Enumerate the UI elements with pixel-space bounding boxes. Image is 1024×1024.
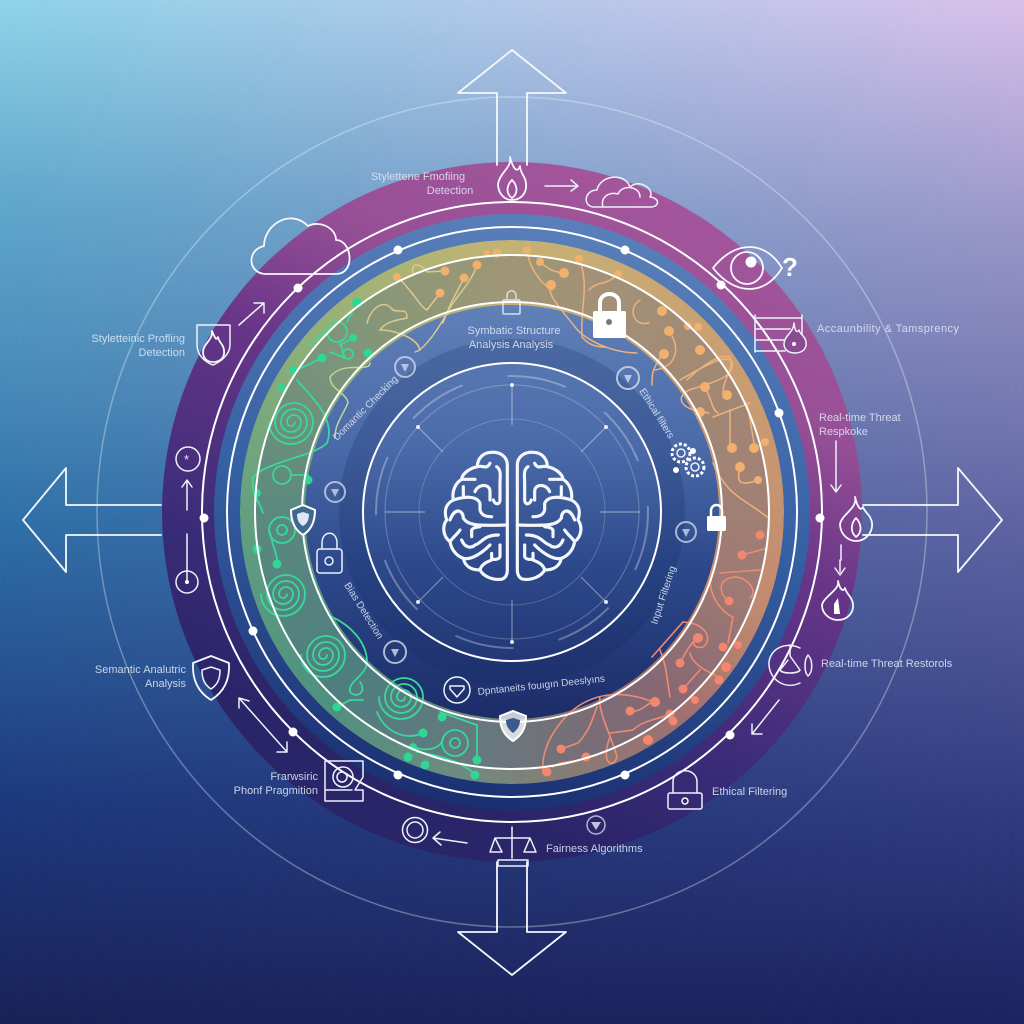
arrow: flame to cloud	[545, 180, 578, 191]
arrow: lower right link	[835, 560, 845, 575]
arrow: lower right	[752, 700, 779, 734]
icon: eye with question mark	[713, 247, 798, 289]
icon: bottom shield badge	[500, 711, 526, 741]
icon: eye with question mark: ?	[782, 252, 798, 282]
arrow: left small	[433, 832, 467, 845]
label: threat restorals: Real-time Threat Restorols	[821, 658, 953, 670]
label: real-time threat response: Real-time Threat	[819, 412, 901, 424]
arrow: up left side	[182, 480, 192, 510]
icon: gears	[672, 444, 704, 476]
icon: large filled lock	[593, 294, 626, 338]
label: syntactic structure: Symbatic Structure	[468, 325, 560, 337]
arrow: down	[458, 862, 566, 975]
arrow: cloud down	[239, 303, 264, 325]
icon: top flame	[498, 157, 526, 200]
label: input filtering, rotated: Input Filtering	[649, 565, 679, 626]
label: profiling detection left: Detection	[139, 347, 185, 359]
icon: inner faint lock	[503, 291, 520, 314]
icon: small shield left	[291, 505, 315, 535]
icon: badge ethical	[617, 367, 639, 389]
label: profiling detection top: Detection	[427, 185, 473, 197]
brain icon	[444, 452, 581, 579]
spectrum ring	[240, 240, 784, 784]
green circuit traces and spirals	[252, 303, 477, 775]
salmon circuit nodes	[542, 530, 764, 776]
icon: scales	[490, 827, 536, 866]
purple outer band	[162, 162, 862, 862]
yellow and pale traces	[330, 265, 477, 438]
main white rings	[97, 97, 927, 927]
icon: framed eye	[325, 761, 363, 801]
label: syntactic structure: Analysis Analysis	[469, 339, 554, 351]
icon: shield	[193, 656, 229, 700]
icon: badge left	[325, 482, 345, 502]
spectrum inner shading	[279, 279, 745, 745]
icon: badge bias	[384, 641, 406, 663]
blue band	[214, 214, 810, 810]
label: semantic checking, rotated: Domantic Checking	[331, 374, 400, 443]
icon: filled small lock	[707, 505, 726, 531]
icon: ring	[402, 818, 428, 842]
icon: large cloud	[251, 218, 350, 274]
icon: top cloud	[586, 177, 658, 207]
arrow: up	[458, 50, 566, 165]
label: accountability: Accaunbility & Tamsprency	[817, 323, 960, 335]
arrow: right	[863, 468, 1002, 572]
icon: badge input	[676, 522, 696, 542]
label: semantic analysis: Analysis	[145, 678, 186, 690]
arrow: threat response	[831, 441, 841, 492]
icon: target	[176, 534, 198, 593]
arrow: double headed	[239, 698, 287, 752]
label: profiling detection top: Stylettene Fmofiing	[371, 171, 465, 183]
ring nodes	[200, 246, 824, 780]
icon: badge lower	[444, 677, 470, 703]
label: fairness algorithms: Fairness Algorithms	[546, 843, 643, 855]
label: bias detection, rotated: Bias Detection	[341, 581, 385, 641]
label: semantic analysis: Semantic Analutric	[95, 664, 186, 676]
core shadow band	[351, 351, 673, 673]
label: dynamic design, rotated: Dpntaneits fouıgın Deeslyıns	[477, 674, 605, 698]
icon: padlock bottom right	[668, 771, 702, 809]
icon: barrier with flame	[755, 315, 806, 353]
icon: right lower flame	[822, 581, 853, 620]
left hemisphere	[444, 452, 507, 579]
icon: left flame badge	[197, 325, 230, 365]
core tick dots	[416, 383, 608, 644]
icon: small star circle: *	[184, 452, 189, 467]
icon: badge upper left	[395, 357, 415, 377]
label: real-time threat response: Respkoke	[819, 426, 868, 438]
label: forensic fingerprinting: Frarwsiric	[270, 771, 318, 783]
arrow: flame link	[840, 545, 842, 560]
label: ethical filters, rotated: Ethical filters	[636, 387, 676, 441]
icon: right flame	[840, 497, 872, 541]
inner disk	[305, 305, 719, 719]
icon: threat circle	[769, 645, 812, 685]
core radial ticks	[385, 385, 640, 642]
arrow: left	[23, 468, 161, 572]
icon: small star circle	[176, 447, 200, 471]
label: profiling detection left: Styletteinic Profling	[91, 333, 185, 345]
label: ethical filtering: Ethical Filtering	[712, 786, 787, 798]
right hemisphere	[517, 452, 581, 579]
green circuit nodes	[252, 298, 482, 780]
icon: outlined lock	[317, 533, 342, 573]
orange circuit traces	[527, 250, 767, 517]
icon: small shield circle	[587, 816, 605, 834]
orange circuit nodes	[393, 246, 769, 484]
label: forensic fingerprinting: Phonf Pragmition	[234, 785, 318, 797]
salmon circuit traces	[543, 548, 768, 773]
